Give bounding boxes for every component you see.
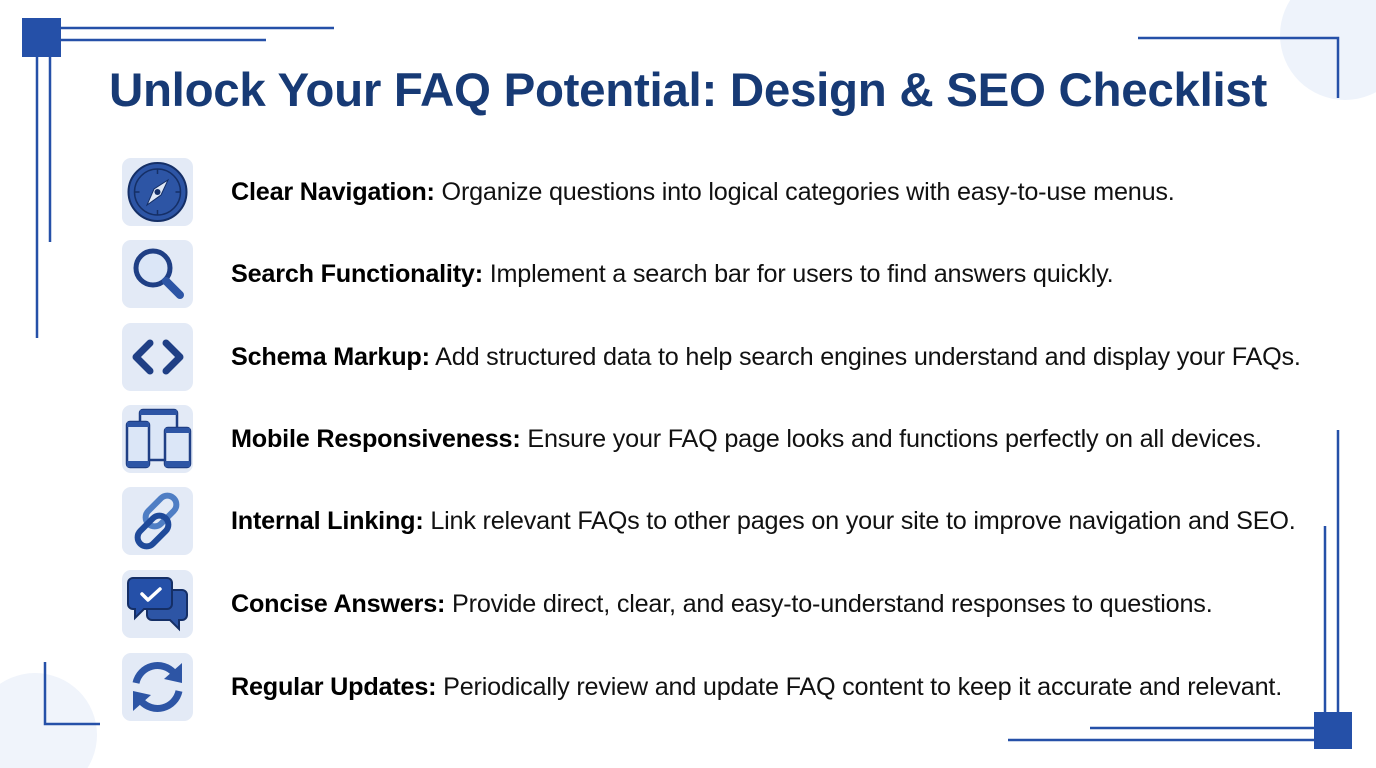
item: mobile — [122, 405, 1262, 473]
text: Mobile Responsiveness: Ensure your FAQ page looks and functions perfectly on all devices. — [231, 425, 1262, 453]
text: Schema Markup: Add structured data to help search engines understand and display your FAQs. — [231, 343, 1301, 371]
text: Search Functionality: Implement a search bar for users to find answers quickly. — [231, 260, 1113, 288]
item: schema — [122, 323, 1301, 391]
item: regular updates — [122, 653, 1282, 721]
icon: magnifier — [122, 240, 193, 308]
item: internal linking — [122, 487, 1296, 555]
icon: devices — [122, 405, 193, 473]
icon: refresh arrows — [122, 653, 193, 721]
icon: chat bubbles — [122, 570, 193, 638]
item: search — [122, 240, 1113, 308]
title: Unlock Your FAQ Potential: Design & SEO Checklist — [109, 64, 1267, 117]
icon: compass — [122, 158, 193, 226]
text: Regular Updates: Periodically review and update FAQ content to keep it accurate and relevant. — [231, 673, 1282, 701]
item: clear navigation — [122, 158, 1175, 226]
icon: chain link — [122, 487, 193, 555]
text: Clear Navigation: Organize questions into logical categories with easy-to-use menus. — [231, 178, 1175, 206]
item: concise answers — [122, 570, 1212, 638]
text: Concise Answers: Provide direct, clear, and easy-to-understand responses to questions. — [231, 590, 1212, 618]
icon: code brackets — [122, 323, 193, 391]
text: Internal Linking: Link relevant FAQs to other pages on your site to improve navigation and SEO. — [231, 507, 1296, 535]
